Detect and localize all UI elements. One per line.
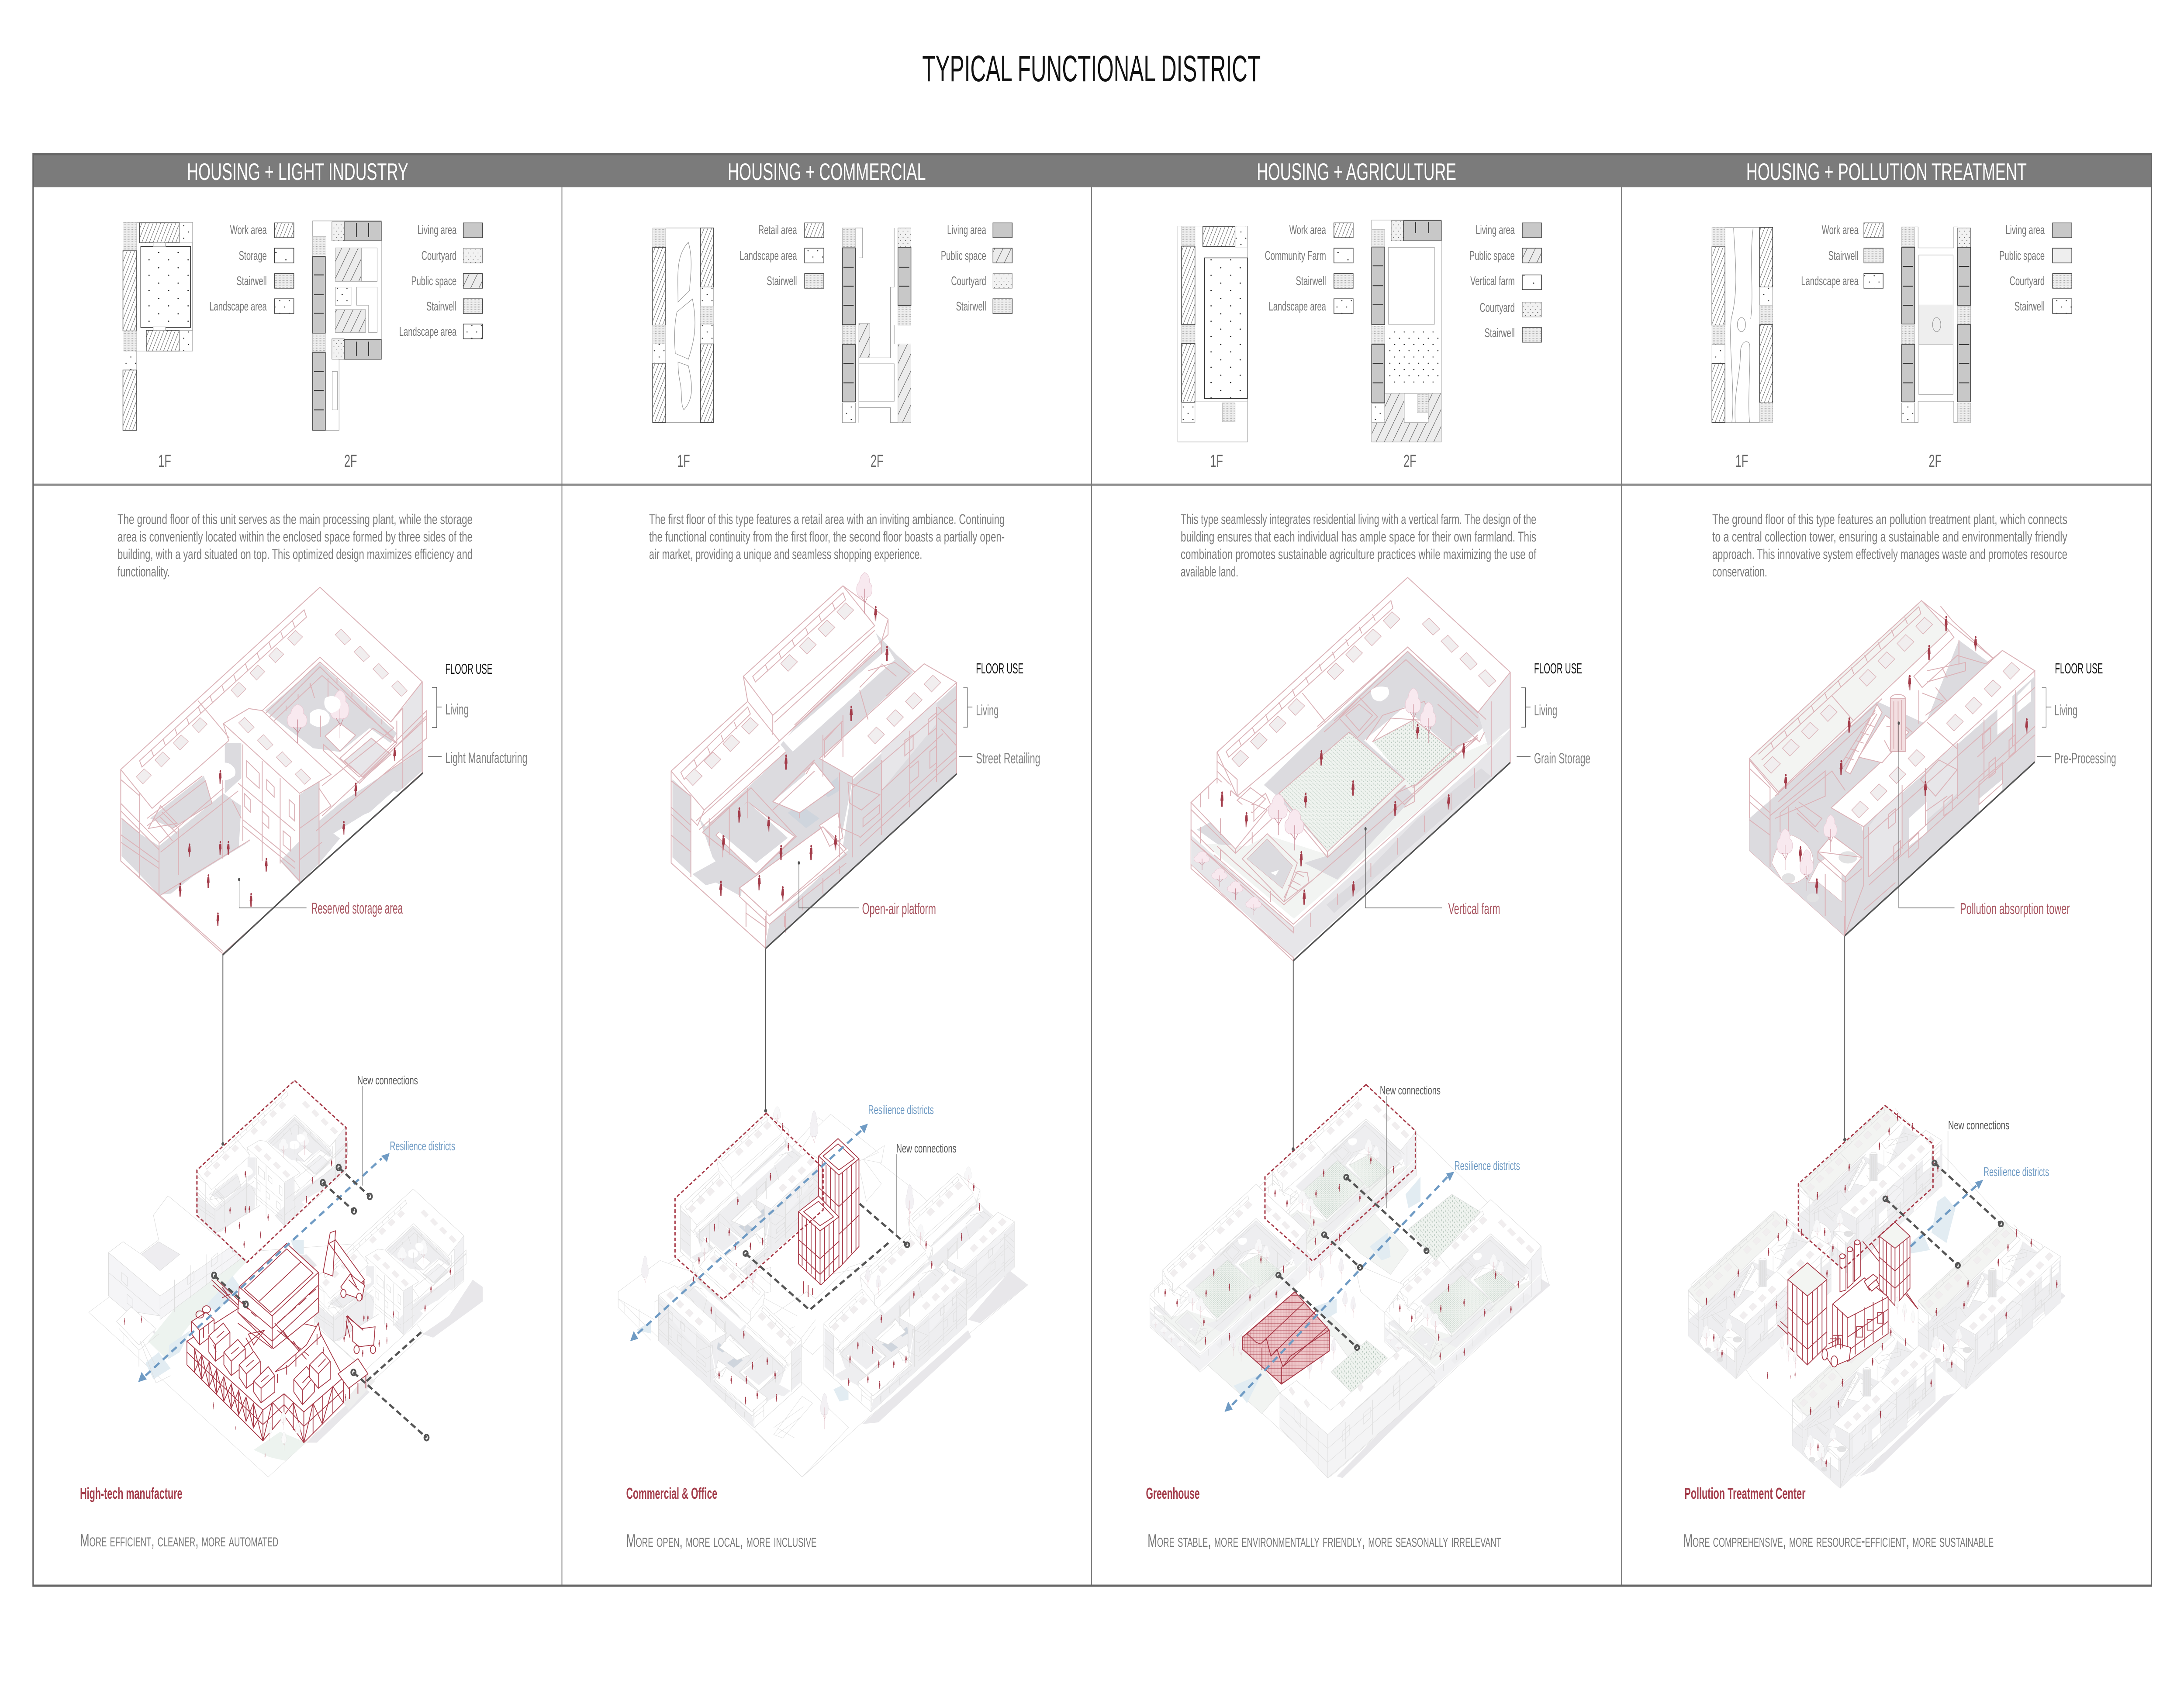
floor labels: 2F bbox=[871, 452, 883, 471]
legend 2F: Stairwell bbox=[956, 300, 986, 314]
description: available land. bbox=[1181, 564, 1238, 580]
bottom edge of slab bbox=[766, 774, 957, 949]
legend 1F: Stairwell bbox=[767, 274, 797, 288]
function title: Commercial & Office bbox=[626, 1485, 717, 1502]
labels: new connections: New connections bbox=[357, 1073, 418, 1087]
axonometric building bbox=[121, 587, 427, 954]
legend 1F: Storage bbox=[239, 249, 267, 263]
tagline: More comprehensive, more resource-efficient, more sustainable bbox=[1683, 1531, 1994, 1551]
floor plan 1F bbox=[653, 228, 713, 423]
legend 2F bbox=[1469, 223, 1541, 342]
floor use labels: FLOOR USE bbox=[445, 661, 492, 677]
callout: open-air platform bbox=[798, 861, 936, 918]
connector line bbox=[222, 955, 224, 1144]
legend 1F: Landscape area bbox=[740, 249, 797, 263]
floor plan 2F bbox=[1902, 227, 1970, 423]
legend 1F: Work area bbox=[1289, 223, 1326, 237]
axonometric building bbox=[1191, 577, 1510, 961]
callout: pollution absorption tower: Pollution absorption tower bbox=[1960, 900, 2070, 918]
overlays bbox=[1225, 1085, 1454, 1412]
legend 2F: Vertical farm bbox=[1470, 274, 1515, 288]
description: functionality. bbox=[117, 564, 170, 580]
floor labels: 2F bbox=[1929, 452, 1942, 471]
floor plan 2F bbox=[1372, 220, 1441, 442]
bottom edge of slab bbox=[1293, 762, 1510, 961]
description: building ensures that each individual has ample space for their own farmland. This bbox=[1181, 529, 1536, 545]
labels: new connections: New connections bbox=[1948, 1118, 2009, 1132]
description: the functional continuity from the first floor, the second floor boasts a partially open- bbox=[649, 529, 1005, 545]
legend 2F bbox=[399, 223, 483, 339]
heading: HOUSING + COMMERCIAL bbox=[728, 158, 926, 185]
tagline: More efficient, cleaner, more automated bbox=[80, 1530, 278, 1551]
site and surrounding buildings bbox=[89, 1196, 483, 1477]
site and surrounding buildings bbox=[618, 1114, 1028, 1477]
heading: HOUSING + POLLUTION TREATMENT bbox=[1746, 158, 2027, 185]
callout: vertical farm bbox=[1365, 827, 1500, 918]
floor labels: 1F bbox=[1210, 452, 1223, 471]
legend 1F: Landscape area bbox=[1801, 274, 1859, 288]
floor use labels: Street Retailing bbox=[976, 750, 1040, 767]
legend 2F: Living area bbox=[2005, 223, 2045, 237]
floor use labels: FLOOR USE bbox=[1534, 660, 1582, 676]
axonometric building bbox=[671, 573, 957, 948]
floor use labels bbox=[2037, 660, 2116, 767]
legend 2F: Living area bbox=[947, 223, 986, 237]
district axonometric bbox=[89, 1080, 483, 1477]
heading: HOUSING + LIGHT INDUSTRY bbox=[187, 158, 408, 185]
legend 2F: Stairwell bbox=[426, 300, 456, 314]
description bbox=[649, 511, 1005, 562]
legend 2F: Courtyard bbox=[951, 274, 986, 288]
legend 2F: Living area bbox=[1476, 223, 1515, 237]
floor labels: 1F bbox=[1735, 452, 1748, 471]
floor labels: 2F bbox=[1403, 452, 1417, 471]
description: combination promotes sustainable agriculture practices while maximizing the use of bbox=[1181, 546, 1537, 562]
legend 2F: Courtyard bbox=[2010, 274, 2045, 288]
floor labels bbox=[1210, 452, 1417, 471]
floor plan 2F bbox=[313, 221, 381, 430]
overlays bbox=[630, 1109, 909, 1341]
description: to a central collection tower, ensuring a sustainable and environmentally friendly bbox=[1712, 529, 2067, 545]
tagline: More open, more local, more inclusive bbox=[626, 1531, 816, 1551]
legend 1F: Stairwell bbox=[1828, 249, 1859, 263]
floor use labels bbox=[959, 660, 1040, 767]
description: The ground floor of this type features an pollution treatment plant, which connects bbox=[1712, 511, 2067, 527]
description bbox=[1712, 511, 2067, 580]
floor use labels: Grain Storage bbox=[1534, 750, 1590, 767]
extra block and greenhouse bbox=[1231, 1194, 1480, 1478]
floor labels bbox=[158, 452, 357, 471]
labels: resilience districts: Resilience districts bbox=[1455, 1159, 1520, 1173]
legend 2F: Courtyard bbox=[1479, 301, 1515, 315]
legend 1F: Work area bbox=[1822, 223, 1859, 237]
callout: vertical farm: Vertical farm bbox=[1448, 900, 1500, 918]
tagline: More stable, more environmentally friendly, more seasonally irrelevant bbox=[1147, 1531, 1501, 1551]
floor use labels: FLOOR USE bbox=[2055, 660, 2103, 676]
description: area is conveniently located within the enclosed space formed by three sides of the bbox=[117, 529, 473, 545]
legend 2F: Public space bbox=[1999, 249, 2045, 263]
connector line bbox=[1292, 961, 1294, 1149]
district axonometric bbox=[1688, 1105, 2066, 1488]
legend 2F: Public space bbox=[1469, 249, 1515, 263]
callout: reserved storage area: Reserved storage area bbox=[311, 900, 403, 917]
floor use labels: Light Manufacturing bbox=[445, 750, 528, 766]
panel: housing + light industry bbox=[80, 158, 528, 1551]
function title: Greenhouse bbox=[1146, 1485, 1200, 1502]
floor use labels bbox=[428, 661, 528, 766]
district axonometric bbox=[618, 1106, 1028, 1477]
legend 2F: Stairwell bbox=[2015, 300, 2045, 314]
labels: new connections: New connections bbox=[1380, 1083, 1441, 1097]
labels: new connections: New connections bbox=[896, 1142, 957, 1155]
overlays: hexagon, connections, resilience arrow bbox=[138, 1080, 429, 1440]
floor plan 1F bbox=[1712, 228, 1773, 423]
legend 2F: Living area bbox=[418, 223, 457, 237]
legend 1F: Landscape area bbox=[1269, 300, 1326, 314]
description: air market, providing a unique and seamless shopping experience. bbox=[649, 546, 922, 562]
legend 2F: Stairwell bbox=[1485, 326, 1515, 340]
connector line bbox=[1844, 936, 1845, 1140]
legend 2F: Public space bbox=[411, 274, 456, 288]
axonometric building bbox=[1749, 600, 2035, 936]
site and buildings bbox=[1691, 1106, 2066, 1477]
legend 2F: Landscape area bbox=[399, 325, 457, 339]
description: The ground floor of this unit serves as the main processing plant, while the storage bbox=[117, 511, 473, 527]
title: TYPICAL FUNCTIONAL DISTRICT bbox=[922, 48, 1261, 89]
floor use labels: Living bbox=[445, 701, 469, 718]
description bbox=[1181, 511, 1537, 580]
floor labels bbox=[1735, 452, 1942, 471]
floor plan 1F bbox=[123, 222, 193, 430]
panel: housing + commercial bbox=[618, 158, 1040, 1551]
legend 1F: Retail area bbox=[758, 223, 797, 237]
site and buildings bbox=[1154, 1085, 1551, 1478]
description: This type seamlessly integrates residential living with a vertical farm. The design of the bbox=[1181, 511, 1536, 527]
floor use labels: Pre-Processing bbox=[2054, 750, 2116, 767]
legend 2F bbox=[1999, 223, 2072, 314]
legend 1F: Work area bbox=[230, 223, 267, 237]
labels: resilience districts: Resilience districts bbox=[1984, 1165, 2049, 1179]
function title: Pollution Treatment Center bbox=[1684, 1485, 1806, 1502]
connector line bbox=[765, 949, 766, 1111]
labels: resilience districts: Resilience districts bbox=[868, 1103, 934, 1117]
floor use labels: Living bbox=[976, 702, 999, 719]
floor labels: 1F bbox=[158, 452, 171, 471]
legend 1F bbox=[1265, 223, 1353, 314]
floor use labels: FLOOR USE bbox=[976, 660, 1023, 676]
floor labels: 2F bbox=[344, 452, 357, 471]
panel: housing + agriculture bbox=[1146, 158, 1590, 1551]
legend 1F: Community Farm bbox=[1265, 249, 1326, 263]
description: approach. This innovative system effectively manages waste and promotes resource bbox=[1712, 546, 2067, 562]
callout: reserved storage area bbox=[238, 878, 403, 917]
floor use labels bbox=[1517, 660, 1590, 767]
floor use labels: Living bbox=[2054, 702, 2077, 719]
new factory in red bbox=[124, 1231, 394, 1459]
description: The first floor of this type features a retail area with an inviting ambiance. Continuing bbox=[649, 511, 1005, 527]
description bbox=[117, 511, 473, 580]
floor labels: 1F bbox=[677, 452, 690, 471]
function title: High-tech manufacture bbox=[80, 1485, 182, 1502]
floor use labels: Living bbox=[1534, 702, 1557, 719]
callout: open-air platform: Open-air platform bbox=[862, 900, 936, 918]
floor labels bbox=[677, 452, 883, 471]
description: building, with a yard situated on top. This optimized design maximizes efficiency and bbox=[117, 546, 473, 562]
floor plan 2F bbox=[842, 228, 911, 423]
treatment plant in red bbox=[1767, 1222, 1918, 1379]
district axonometric bbox=[1150, 1085, 1551, 1478]
callout: pollution absorption tower bbox=[1897, 721, 2070, 918]
legend 2F: Courtyard bbox=[422, 249, 456, 263]
legend 1F: Landscape area bbox=[209, 300, 267, 314]
legend 1F: Stairwell bbox=[1296, 274, 1326, 288]
legend 1F bbox=[209, 223, 294, 314]
overlays bbox=[1798, 1106, 2003, 1269]
bottom edge of slab bbox=[1845, 762, 2035, 936]
new towers in red bbox=[642, 1111, 914, 1429]
cranes bbox=[323, 1231, 365, 1285]
legend 2F: Public space bbox=[941, 249, 986, 263]
bottom edge of slab bbox=[223, 773, 423, 955]
description: conservation. bbox=[1712, 564, 1767, 580]
legend 1F bbox=[1801, 223, 1883, 288]
legend 2F bbox=[941, 223, 1012, 314]
heading: HOUSING + AGRICULTURE bbox=[1257, 158, 1456, 185]
legend 1F: Stairwell bbox=[237, 274, 267, 288]
labels: resilience districts: Resilience districts bbox=[390, 1139, 455, 1153]
legend 1F bbox=[740, 223, 824, 288]
panel: housing + pollution treatment bbox=[1683, 158, 2116, 1551]
floor plan 1F bbox=[1178, 226, 1248, 442]
